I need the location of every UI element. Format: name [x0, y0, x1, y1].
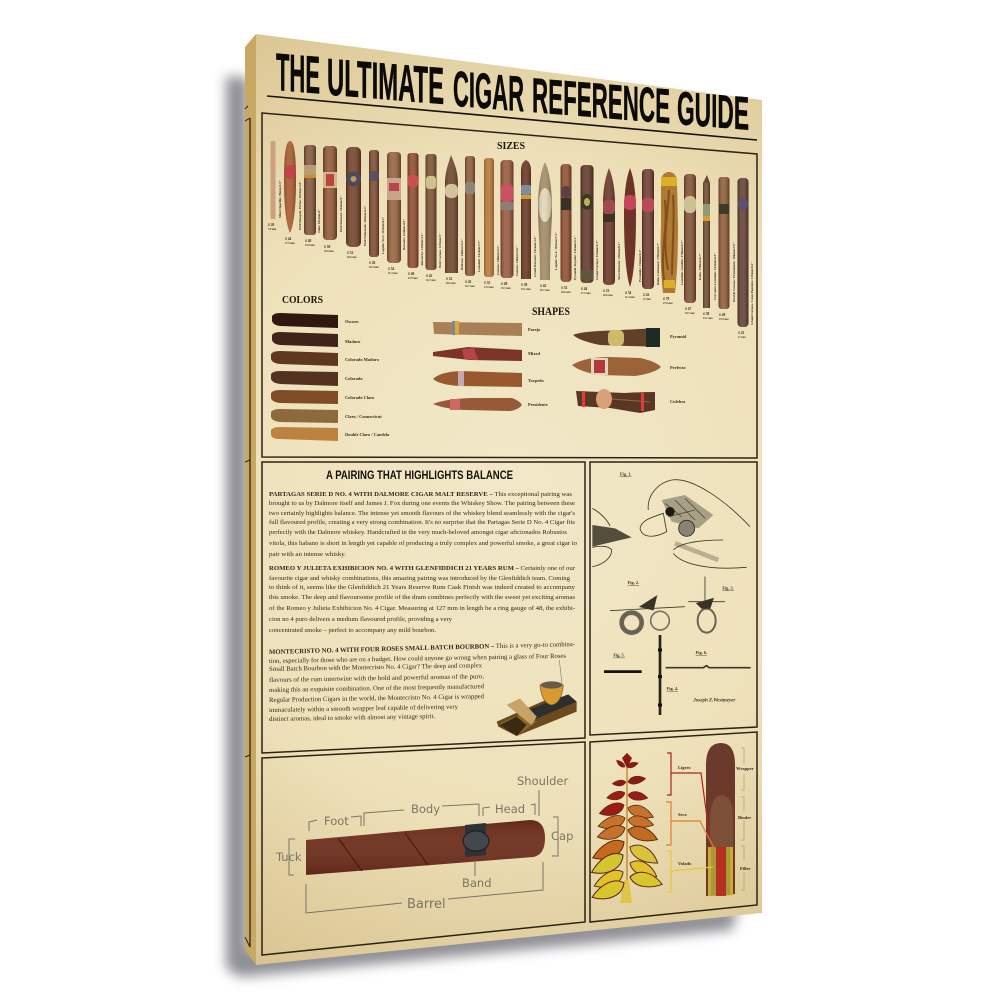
- shape: mixed: Mixed: [528, 351, 541, 356]
- heading: colors: COLORS: [282, 294, 323, 306]
- cigar 18: # 52: [603, 289, 609, 293]
- cigar 14: [521, 160, 537, 291]
- right brackets and labels: Binder: [738, 815, 751, 820]
- cigar 20: 17 mm: [643, 298, 651, 301]
- cigar 4: # 50: [324, 245, 330, 249]
- cigar 11: 16.7 mm: [465, 285, 475, 288]
- cigar 12: Corona: 140mm/5.5": [496, 245, 500, 275]
- cigar 17: # 44: [581, 287, 587, 291]
- label: barrel: Barrel: [407, 897, 446, 912]
- paragraph: partagas: PARTAGAS SERIE D NO. 4 WITH DALMORE CIGAR MALT RESERVE – This exceptional pairing was: [269, 491, 572, 498]
- cigar 5: Petit Edmundo: 110mm/4.3": [363, 205, 367, 246]
- cigar 1: # 20: [268, 223, 274, 227]
- shape: torpedo: [433, 371, 545, 387]
- cigar 3: # 40: [305, 239, 311, 243]
- canvas front face: [256, 34, 762, 965]
- paragraph: montecristo: Small Batch Bourbon with the Montecristo No. 4 Cigar? The deep and complex: [269, 662, 483, 673]
- cigar 16: Pyramid Torpedo: 156mm/6.1": [573, 236, 577, 280]
- label: foot: [309, 814, 361, 831]
- cigar 8: [408, 153, 424, 280]
- cigar 14: 15.1 mm: [521, 288, 531, 291]
- right brackets and labels: Filler: [740, 866, 750, 871]
- heading: sizes: SIZES: [497, 141, 525, 152]
- cigar 3: Julia: 102mm/4": [317, 209, 321, 233]
- paragraph: montecristo: MONTECRISTO NO. 4 WITH FOUR ROSES SMALL BATCH BOURBON – This is a very go-to combina-: [269, 641, 575, 656]
- leaf bracket: seco: Seco: [678, 812, 687, 817]
- cigar 13: # 48: [501, 282, 507, 286]
- paragraph: partagas: brought to us by Dalmore itself and James J. Fox during one events the Whiskey Show. The pairing between these: [269, 500, 575, 507]
- cigar 6: [369, 150, 385, 269]
- canvas side edge: [245, 34, 256, 965]
- swatch: oscuro: Oscuro: [345, 319, 359, 324]
- cigar 19: 21.4 mm: [625, 296, 635, 299]
- title: THE: [276, 43, 320, 106]
- cigar 7: 21.4 mm: [388, 272, 398, 275]
- shape: mixed: [433, 347, 541, 361]
- cigar 22: 18.7 mm: [685, 312, 695, 315]
- cigar 6: 10.3 mm: [369, 266, 379, 269]
- cigar 24: Double Corona / Prominente: 194mm/7.6": [732, 242, 736, 302]
- cigar 11: [465, 156, 481, 288]
- label: tuck: [275, 839, 302, 875]
- paragraph: partagas: perfectly with the Dalmore whiskey. Handcrafted in the very much-beloved amongst cigar aficionados Robustos: [269, 529, 567, 536]
- cigar 15: Laguito No.1: 192mm/7.5": [554, 232, 558, 270]
- cigar 18: [603, 168, 621, 297]
- cigar 2: [284, 141, 302, 245]
- cigar 17: [580, 165, 599, 295]
- paragraph: montecristo: flavours of the rum intertwine with the bold and powerful aromas of the puro,: [269, 673, 484, 684]
- paragraph: romeo y julieta: cion no 4 puro delivers a medium flavoured profile, providing a very: [269, 616, 453, 623]
- cigar 22: [684, 174, 702, 315]
- cigar 25: 17 mm: [738, 336, 746, 339]
- canvas drop shadow: [226, 76, 738, 977]
- panel: tobacco plant and filler: [588, 732, 757, 922]
- cigar 10: Belicoso: 140mm/5.5": [460, 239, 464, 270]
- cigar 16: # 52: [561, 286, 567, 290]
- cigar 16: 20.6 mm: [561, 291, 571, 294]
- cigar 17: 17.5 mm: [581, 292, 591, 295]
- cigar 5: [346, 147, 367, 259]
- cigar 12: # 35: [484, 281, 490, 285]
- paragraph: montecristo: [269, 641, 575, 723]
- paragraph: partagas: vitola, this habano is short in length yet capable of producing a truly complex and powerful smoke, a great cigar to: [269, 540, 578, 547]
- label: shoulder: [517, 774, 568, 816]
- cigar 20: [642, 169, 660, 301]
- cigar 21: Lonsdale, Gordito: 170mm/6.7": [680, 240, 684, 285]
- paragraph: montecristo: distinct aromas, ideal to smoke with almost any vintage spirit.: [269, 713, 435, 723]
- swatch: maduro: Maduro: [345, 339, 361, 344]
- leaf bracket: ligero: Ligero: [678, 765, 691, 770]
- cigar 23: [703, 175, 717, 320]
- cigar 6: # 26: [369, 261, 375, 265]
- label: band: Band: [462, 876, 492, 890]
- leaf bracket: volado: Volado: [678, 861, 692, 866]
- cigar 23: 15.1 mm: [703, 317, 713, 320]
- cigar 4: 19.8 mm: [324, 250, 334, 253]
- title: CIGAR: [453, 61, 524, 122]
- title rule: [267, 96, 757, 140]
- cigar 13: Corona: 142mm/5.6": [515, 246, 519, 276]
- shape: pyramid: Pyramid: [670, 334, 687, 339]
- label: foot: Foot: [324, 814, 349, 828]
- paragraph: montecristo: immaculately within a smooth wrapper leaf capable of delivering very: [269, 704, 459, 714]
- swatch: colorado claro: Colorado Claro: [345, 395, 375, 400]
- cigar 19: # 54: [625, 291, 631, 295]
- cigar 1: Mini Cigarillo: 70mm/1.5": [278, 180, 282, 218]
- paragraph: romeo y julieta: this smoke. The deep and flavoursome profile of the dram combines perfectly with the sweet yet exciting aromas: [269, 594, 575, 601]
- filler cross-section cigar: [706, 743, 735, 896]
- cigar 22: # 47: [685, 307, 691, 311]
- cigar 17: Grand Corona: 155mm/6.1": [595, 240, 599, 280]
- cigar 21: # 70: [663, 297, 669, 301]
- cigar 10: 20.6 mm: [446, 282, 456, 285]
- shape: presidente: [433, 398, 548, 411]
- paragraph: romeo y julieta: of the Romeo y Julieta Exhibicion No. 4 Cigar. Measuring at 127 mm in length be a ring gauge of 48, the exhibi-: [269, 605, 575, 612]
- cigar 12: [484, 158, 500, 289]
- panel: pairing text: [262, 462, 585, 753]
- paragraph: partagas: full flavoured profile, creating a very strong combination. It's no surprise that the Partagas Serie D No. 4 Cigar fits: [269, 519, 575, 526]
- label: barrel: [306, 862, 543, 913]
- cigar 21: 27.8 mm: [663, 302, 673, 305]
- cigar 9: 16.7 mm: [426, 279, 436, 282]
- cigar 16: [560, 164, 577, 294]
- figure 1: hand with cigar cutter: [592, 480, 750, 568]
- cigar 8: Almuerzo: 130mm/5.1": [420, 233, 424, 266]
- figure labels: Fig. 5.: [613, 653, 625, 658]
- label: tuck: Tuck: [275, 850, 302, 864]
- cigar 5: # 52: [347, 251, 353, 255]
- cigar 11: # 42: [465, 280, 471, 284]
- label: cap: Cap: [551, 829, 573, 843]
- cigar 23: # 38: [703, 312, 709, 316]
- paragraph: montecristo: Regular Production Cigars in the world, the Montecristo No. 4 Cigar is wrapped: [269, 693, 485, 704]
- shape: presidente: Presidente: [528, 402, 548, 407]
- paragraph: montecristo: making this an exquisite combination. One of the most frequently manufactured: [269, 683, 485, 694]
- leaf bracket: volado: [667, 851, 713, 892]
- shape: torpedo: Torpedo: [528, 378, 545, 383]
- figure labels: Fig. 6.: [696, 650, 707, 655]
- cigar 7: Robusto: 124mm/4.9": [402, 219, 406, 250]
- cigar 1: [268, 141, 282, 231]
- label: body: Body: [411, 802, 440, 816]
- paragraph: romeo y julieta: favourite cigar and whisky combinations, this amazing pairing was introduced by the Glenfiddich team. Coming: [269, 575, 571, 582]
- paragraph: romeo y julieta: ROMEO Y JULIETA EXHIBICION NO. 4 WITH GLENFIDDICH 21 YEARS RUM – Certainly one of our: [269, 565, 576, 572]
- cigar 24: 19.5 mm: [719, 318, 729, 321]
- cigar 10: [445, 155, 464, 285]
- cigar 2: 17.5 mm: [285, 242, 295, 245]
- swatch: colorado maduro: Colorado Maduro: [345, 357, 380, 362]
- cigar 15: 16.7 mm: [540, 289, 550, 292]
- swatch: claro: Claro / Connecticut: [345, 414, 382, 419]
- cigar 23: Cervantes Lonsdale: 165mm/6.5": [713, 253, 717, 300]
- paragraph: montecristo: tion, especially for those who are on a budget. How could anyone go wrong when pairing a glass of Four Roses: [269, 653, 566, 665]
- heading: shapes: SHAPES: [532, 306, 570, 318]
- color swatches: [271, 313, 390, 441]
- icon: whisky glass and cigar on wooden tray: [497, 660, 577, 736]
- cigar 1: 7.9 mm: [268, 228, 277, 231]
- cigar 8: 15.9 mm: [408, 277, 418, 280]
- shape: culebra: Culebra: [670, 399, 686, 404]
- cigar 5: 20.6 mm: [347, 256, 357, 259]
- heading: pairing: A PAIRING THAT HIGHLIGHTS BALANCE: [326, 468, 513, 482]
- cigar 25: [738, 178, 754, 339]
- panel: sizes, colors and shapes: [262, 113, 757, 458]
- leaf bracket: seco: [666, 802, 716, 852]
- label: shoulder: Shoulder: [517, 774, 568, 788]
- cigar 4: Petit Robusto: 102mm/4": [339, 196, 343, 232]
- shape: perfecto: [572, 357, 686, 376]
- cigar 2: # 44: [285, 237, 291, 241]
- cigar 2: Petit Bouquet, Perlas: 101mm/3.8": [298, 181, 302, 230]
- panel: patent drawings: [590, 462, 757, 735]
- label: band: [462, 862, 492, 890]
- cigar 19: [624, 168, 642, 299]
- cigar 13: 19.1 mm: [501, 287, 511, 290]
- figure labels: Fig. 4.: [667, 686, 678, 691]
- right brackets and labels: [736, 748, 754, 890]
- cigar 7: # 54: [388, 267, 394, 271]
- anatomy cigar: [306, 820, 545, 875]
- paragraph: romeo y julieta: to think of it, seems like the Glenfiddich 21 Years Reserve Rum Cask Finish was indeed created to accompany: [269, 584, 576, 591]
- cigar 24: # 49: [719, 313, 725, 317]
- label: cap: [551, 817, 573, 856]
- title: REFERENCE: [532, 69, 670, 134]
- cigar 22: Dalia: 170mm/6.7": [698, 253, 702, 280]
- cigar 3: 15.9 mm: [305, 244, 315, 247]
- shape: pyramid: [573, 328, 687, 347]
- figure 2: double ring tool: [610, 596, 685, 715]
- paragraph: partagas: pair with an intense whisky.: [269, 551, 346, 558]
- shape: parejo: [433, 321, 541, 336]
- cigar 24: [718, 177, 736, 321]
- paragraph: romeo y julieta: concentrated smoke – perfect to accompany any mild bourbon.: [269, 627, 436, 634]
- text: GUIDE: [677, 81, 749, 140]
- cigar 13: [500, 160, 519, 290]
- label: body: [364, 802, 479, 826]
- cigar 14: # 38: [521, 283, 527, 287]
- chart: cigar sizes: [268, 141, 754, 339]
- cigar shapes: [433, 321, 687, 413]
- cigar 9: # 42: [426, 274, 432, 278]
- cigar 20: # 43: [643, 293, 649, 297]
- figure labels: Fig. 1.: [620, 471, 631, 476]
- cigar 15: # 42: [540, 284, 546, 288]
- shape: parejo: Parejo: [528, 327, 541, 332]
- cigar 11: Lonsdale: 143mm/5.7": [477, 240, 481, 272]
- cigar 12: 13.9 mm: [484, 286, 494, 289]
- cigar 4: [323, 146, 343, 253]
- cigar 25: # 43: [738, 331, 744, 335]
- right brackets and labels: Wrapper: [736, 766, 754, 771]
- leaf bracket: ligero: [667, 753, 711, 847]
- title: ULTIMATE: [327, 49, 444, 116]
- figure 3: single ring tool: [688, 577, 725, 633]
- paragraph: romeo y julieta: [269, 565, 576, 634]
- cigar 3: [304, 145, 321, 247]
- figure labels: Fig. 2.: [628, 580, 639, 585]
- figure labels: Fig. 3.: [722, 585, 734, 590]
- figure 5: bar detail: [604, 670, 642, 673]
- cigar 18: 20.6 mm: [603, 294, 613, 297]
- swatch: double claro: Double Claro / Candela: [345, 432, 390, 437]
- cigar 19: Pyramide: 156mm/6.1": [638, 249, 642, 282]
- figure labels: [613, 471, 734, 691]
- panel: cigar anatomy: [262, 742, 585, 955]
- shape: perfecto: Perfecto: [670, 365, 686, 370]
- label: head: Head: [495, 802, 525, 816]
- cigar 21: [661, 172, 684, 305]
- title: [276, 43, 749, 140]
- cigar 9: Petit Corona: 129mm/5": [438, 233, 442, 268]
- cigar 20: Dalia, Cañonazo: 170mm/6.7": [656, 242, 660, 285]
- cigar 15: [538, 162, 558, 292]
- swatch: colorado: Colorado: [345, 376, 363, 381]
- signature: Joseph Z.Westmeyer: [692, 699, 735, 704]
- paragraph: partagas: two certainly highlights balance. The intense yet smooth flavours of the whiskey blend seamlessly with the cigar's: [269, 510, 575, 517]
- cigar 10: # 52: [446, 277, 452, 281]
- label: head: [483, 802, 535, 816]
- cigar 7: [387, 152, 406, 275]
- shape: culebra: [576, 389, 686, 413]
- cigar 9: [426, 154, 442, 282]
- cigar 18: Toro Robusto: 156mm/6.1": [617, 241, 621, 280]
- paragraph: partagas: [269, 491, 578, 558]
- tobacco plant: [588, 753, 664, 905]
- cigar 25: Grand Corona / Gran Panetela: 235mm/9.2": [750, 262, 754, 325]
- cigar 14: Grand Robusto: 141mm/5.5": [533, 236, 537, 277]
- cigar 6: Laguito No.3: 115mm/4.5": [381, 216, 385, 254]
- cigar 8: # 40: [408, 272, 414, 276]
- anatomy labels and brackets: [275, 774, 573, 913]
- figure 6: rod detail: [666, 666, 751, 668]
